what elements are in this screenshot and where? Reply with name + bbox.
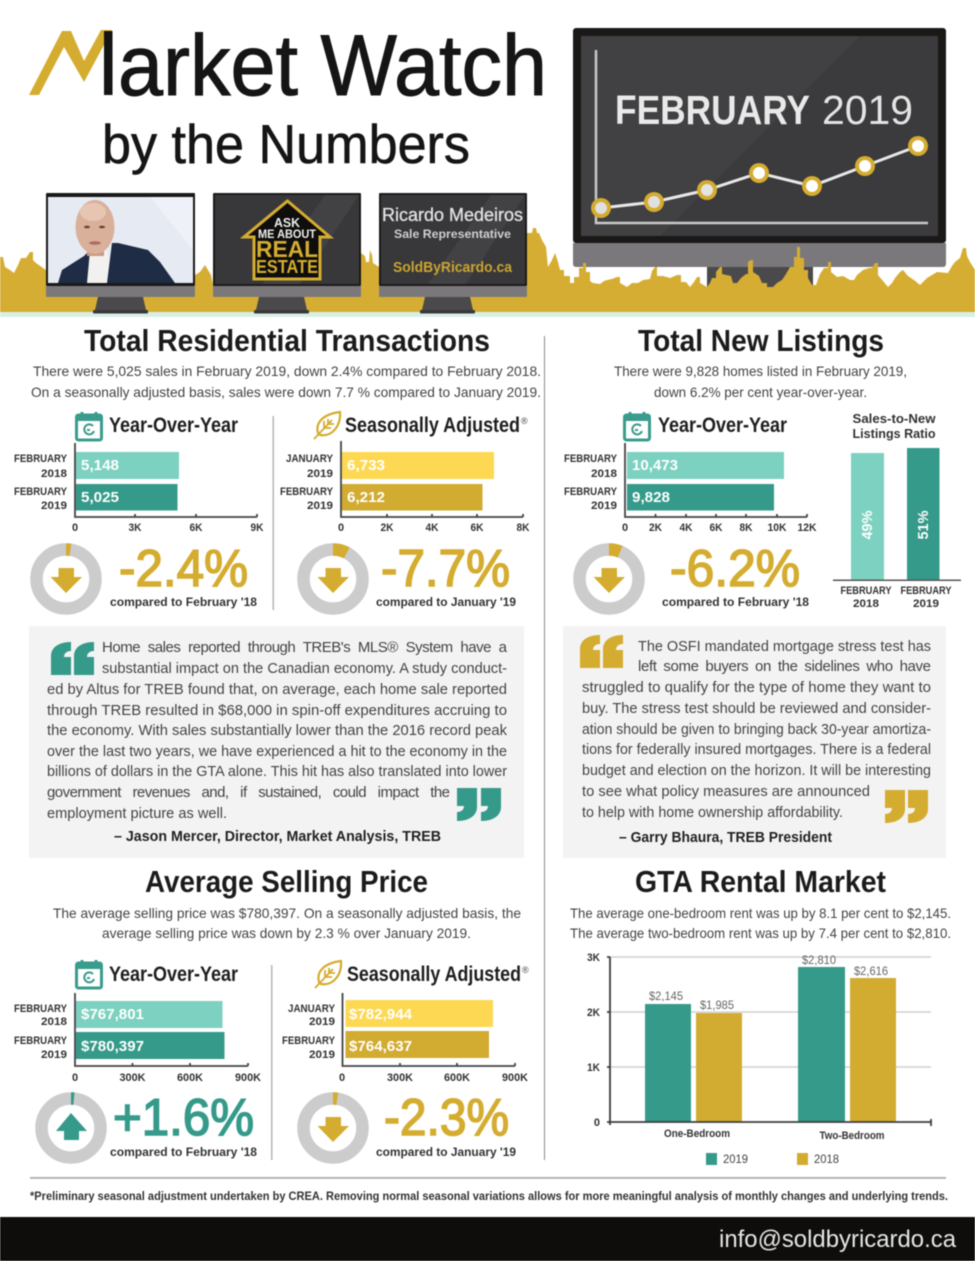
bar chart: sales-to-new listings ratio: FEBRUARY: [840, 585, 892, 597]
summary text: [570, 905, 951, 941]
summary text: [31, 363, 541, 400]
monitor: ask me about real estate logo: [213, 193, 361, 314]
quote text: tions for federally insured mortgages. There is a federal: [582, 741, 931, 758]
bar chart: rents by bedroom count: 0: [594, 1117, 600, 1129]
bar chart: price year over year: FEBRUARY: [14, 1003, 68, 1015]
seasonally adjusted heading: ®: [521, 416, 528, 426]
footnote: *Preliminary seasonal adjustment undertaken by CREA. Removing normal seasonal variations allows for more meaningful analysis of monthly changes and underlying trends.: [30, 1191, 948, 1203]
quote text: ation should be given to bringing back 30-year amortiza-: [582, 721, 931, 738]
bar chart: sales seasonally adjusted: 6,212: [347, 490, 385, 506]
monitor: agent name: Sale Representative: [394, 229, 511, 241]
comparison caption: compared to January '19: [376, 595, 516, 609]
bar chart: sales year over year: 6K: [190, 522, 203, 534]
donut: -6.2%: [580, 550, 638, 608]
summary text: [53, 905, 521, 941]
icon: calendar: [76, 960, 102, 988]
statistic: -6.2%: -6.2%: [670, 540, 800, 598]
donut: -2.3%: [304, 1098, 362, 1158]
icon: leaf: [315, 961, 341, 988]
bar chart: rents by bedroom count: 1K: [587, 1062, 600, 1074]
bar chart: rents by bedroom count: $2,810: [802, 953, 836, 967]
bar chart: price seasonally adjusted: 0: [339, 1072, 345, 1084]
quote text: government revenues and, if sustained, could impact the: [47, 784, 450, 801]
bar chart: price year over year: 2018: [41, 1016, 67, 1028]
section: total residential transactions: [14, 323, 541, 609]
bar chart: listings year over year: 10K: [768, 522, 787, 534]
quote text: [47, 639, 508, 822]
bar chart: sales seasonally adjusted: 6,733: [347, 458, 385, 474]
donut: -2.4%: [36, 550, 96, 608]
bar chart: price year over year: [14, 993, 261, 1084]
footer bar: info@soldbyricardo.ca: [719, 1226, 957, 1253]
year-over-year heading: Year-Over-Year: [109, 963, 238, 986]
quote text: to help with home ownership affordability.: [582, 804, 843, 821]
icon: opening quote mark: [51, 642, 94, 675]
bar chart: price year over year: 2019: [41, 1049, 67, 1061]
comparison caption: compared to February '18: [110, 595, 257, 609]
bar chart: listings year over year: 10,473: [632, 458, 678, 474]
quote text: ed by Altus for TREB found that, on average, each home sale reported: [47, 681, 507, 698]
bar chart: listings year over year: 8K: [740, 522, 753, 534]
large monitor: February 2019 line chart: [573, 28, 946, 287]
summary text: The average two-bedroom rent was up by 7.4 per cent to $2,810.: [570, 925, 951, 941]
quote text: Home sales reported through TREB's MLS® System have a: [102, 639, 508, 656]
bar chart: price year over year: $767,801: [81, 1007, 144, 1023]
monitor: ask me about real estate logo: REAL: [256, 236, 318, 262]
bar chart: listings year over year: FEBRUARY: [564, 486, 618, 498]
donut: -7.7%: [304, 550, 362, 608]
column dividers: [271, 336, 545, 1160]
bar chart: rents by bedroom count: $2,616: [854, 964, 888, 978]
attribution: – Jason Mercer, Director, Market Analysis, TREB: [114, 828, 441, 845]
legend: 2018: [814, 1152, 839, 1166]
bar chart: rents by bedroom count: $1,985: [700, 998, 734, 1012]
quote text: struggled to qualify for the type of home they want to: [582, 679, 931, 696]
seasonally adjusted heading: Seasonally Adjusted: [347, 963, 521, 986]
quote text: budget and election on the horizon. It will be interesting: [582, 762, 931, 779]
monitor: agent photo: [46, 193, 195, 314]
bar chart: listings year over year: 2018: [591, 468, 617, 480]
bar chart: price seasonally adjusted: 2019: [309, 1049, 335, 1061]
monitor: agent name: SoldByRicardo.ca: [393, 260, 513, 276]
monitor: agent name: [379, 193, 527, 314]
month and year: FEBRUARY: [615, 87, 810, 133]
bar chart: listings year over year: 9,828: [632, 490, 670, 506]
seasonally adjusted heading: Seasonally Adjusted: [345, 414, 520, 437]
bar chart: price seasonally adjusted: 900K: [502, 1072, 528, 1084]
year-over-year heading: Year-Over-Year: [109, 414, 238, 437]
summary text: The average one-bedroom rent was up by 8.1 per cent to $2,145.: [570, 905, 951, 921]
monitor: ask me about real estate logo: ASK: [274, 215, 301, 230]
section: average selling price: [14, 864, 529, 1159]
monitor: ask me about real estate logo: ME ABOUT: [258, 229, 316, 241]
bar chart: sales seasonally adjusted: FEBRUARY: [280, 486, 334, 498]
icon: leaf: [314, 412, 340, 439]
statistic: -2.3%: -2.3%: [384, 1089, 509, 1147]
icon: calendar: [624, 412, 650, 440]
month and year: 2019: [822, 87, 913, 133]
panel: Jason Mercer quote: [29, 626, 524, 858]
bar chart: sales seasonally adjusted: JANUARY: [286, 453, 334, 465]
summary text: There were 5,025 sales in February 2019, down 2.4% compared to February 2018.: [33, 363, 541, 379]
statistic: +1.6%: +1.6%: [113, 1089, 254, 1147]
comparison caption: compared to February '18: [662, 595, 809, 609]
comparison caption: compared to February '18: [110, 1145, 257, 1159]
trend line with markers: [591, 136, 928, 218]
quote text: The OSFI mandated mortgage stress test has: [638, 638, 931, 655]
bar chart: price year over year: $780,397: [81, 1039, 144, 1055]
summary text: [614, 363, 907, 400]
summary text: average selling price was down by 2.3 % over January 2019.: [102, 925, 471, 941]
bar chart: price year over year: 300K: [120, 1072, 146, 1084]
bar chart: price seasonally adjusted: [282, 993, 528, 1084]
seasonally adjusted heading: ®: [522, 965, 529, 975]
attribution: – Garry Bhaura, TREB President: [619, 829, 832, 846]
bar chart: sales-to-new listings ratio: 49%: [860, 510, 876, 540]
bar chart: rents by bedroom count: $2,145: [649, 989, 683, 1003]
bar chart: sales-to-new listings ratio: Listings Ratio: [852, 426, 936, 441]
bar chart: price seasonally adjusted: 600K: [444, 1072, 470, 1084]
bar chart: listings year over year: 6K: [710, 522, 723, 534]
quote text: substantial impact on the Canadian economy. A study conduct-: [102, 660, 507, 677]
quote text: employment picture as well.: [47, 805, 227, 822]
bar chart: sales year over year: 0: [72, 522, 78, 534]
bar chart: sales year over year: 5,148: [81, 458, 119, 474]
icon: calendar: [76, 412, 102, 440]
bar chart: sales seasonally adjusted: 4K: [426, 522, 439, 534]
bar chart: sales seasonally adjusted: 6K: [470, 522, 484, 534]
bar chart: sales seasonally adjusted: [280, 441, 530, 534]
bar chart: rents by bedroom count: 3K: [587, 952, 600, 964]
bar chart: sales seasonally adjusted: 0: [338, 522, 344, 534]
bar chart: rents by bedroom count: Two-Bedroom: [820, 1130, 885, 1142]
bar chart: listings year over year: FEBRUARY: [564, 453, 618, 465]
bar chart: rents by bedroom count: 2K: [587, 1007, 600, 1019]
bar chart: price seasonally adjusted: FEBRUARY: [282, 1035, 336, 1047]
legend: 2019: [723, 1152, 748, 1166]
legend: [706, 1152, 839, 1166]
bar chart: rents by bedroom count: [587, 952, 931, 1142]
monitor: agent name: Ricardo Medeiros: [382, 205, 523, 225]
bar chart: listings year over year: [564, 443, 817, 534]
bar chart: listings year over year: 12K: [798, 522, 817, 534]
bar chart: rents by bedroom count: One-Bedroom: [664, 1128, 730, 1140]
bar chart: price year over year: FEBRUARY: [14, 1035, 68, 1047]
summary text: The average selling price was $780,397. On a seasonally adjusted basis, the: [53, 905, 521, 921]
monitor: ask me about real estate logo: ESTATE: [256, 257, 318, 277]
bar chart: sales-to-new listings ratio: 51%: [916, 510, 932, 540]
summary text: On a seasonally adjusted basis, sales were down 7.7 % compared to January 2019.: [31, 384, 541, 400]
bar chart: sales year over year: 2018: [41, 468, 67, 480]
bar chart: sales year over year: FEBRUARY: [14, 486, 68, 498]
bar chart: sales year over year: 2019: [41, 500, 67, 512]
statistic: -7.7%: -7.7%: [381, 540, 510, 598]
quote text: through TREB resulted in $68,000 in spin-off expenditures accruing to: [47, 702, 507, 719]
section: GTA rental market: [570, 864, 951, 1166]
panel: Garry Bhaura quote: [563, 626, 946, 858]
bar chart: price seasonally adjusted: $782,944: [349, 1007, 412, 1023]
bar chart: sales year over year: 5,025: [81, 490, 119, 506]
icon: closing quote mark: [457, 788, 501, 821]
quote text: to see what policy measures are announced: [582, 783, 870, 800]
bar chart: price seasonally adjusted: $764,637: [349, 1039, 412, 1055]
bar chart: sales seasonally adjusted: 2019: [307, 500, 333, 512]
bar chart: sales-to-new listings ratio: FEBRUARY: [900, 585, 952, 597]
bar chart: sales seasonally adjusted: 2K: [380, 522, 394, 534]
bar chart: price seasonally adjusted: 300K: [387, 1072, 413, 1084]
bar chart: sales year over year: 3K: [128, 522, 142, 534]
icon: closing quote mark: [885, 790, 928, 823]
section: total new listings: [564, 323, 961, 610]
bar chart: sales year over year: 9K: [250, 522, 264, 534]
bar chart: listings year over year: 0: [622, 522, 628, 534]
title: Market Watch: arket Watch: [118, 18, 547, 114]
bar chart: price year over year: 900K: [235, 1072, 261, 1084]
quote text: the economy. With sales substantially lower than the 2016 record peak: [47, 722, 507, 739]
footer bar: [0, 1217, 975, 1261]
bar chart: sales-to-new listings ratio: 2018: [853, 598, 879, 610]
chart axes: [596, 50, 928, 223]
heading: Total New Listings: [638, 323, 884, 358]
bar chart: sales year over year: [14, 443, 264, 534]
quote text: over the last two years, we have experienced a hit to the economy in the: [47, 743, 507, 760]
quote text: left some buyers on the sidelines who have: [638, 658, 931, 675]
bar chart: sales seasonally adjusted: 8K: [516, 522, 530, 534]
mint strip: [0, 312, 975, 317]
bar chart: sales-to-new listings ratio: 2019: [913, 598, 939, 610]
bar chart: sales-to-new listings ratio: [833, 411, 961, 610]
bar chart: sales seasonally adjusted: 2019: [307, 468, 333, 480]
bar chart: listings year over year: 2K: [649, 522, 662, 534]
quote text: buy. The stress test should be reviewed and consider-: [582, 700, 931, 717]
bar chart: price year over year: 600K: [177, 1072, 203, 1084]
quote text: [582, 638, 931, 821]
bar chart: price seasonally adjusted: JANUARY: [288, 1003, 336, 1015]
year-over-year heading: Year-Over-Year: [658, 414, 787, 437]
bar chart: sales year over year: FEBRUARY: [14, 453, 68, 465]
comparison caption: compared to January '19: [376, 1145, 516, 1159]
summary text: There were 9,828 homes listed in February 2019,: [614, 363, 907, 379]
quote text: billions of dollars in the GTA alone. This hit has also translated into lower: [47, 763, 507, 780]
skyline band: [0, 228, 975, 312]
bar chart: price year over year: 0: [72, 1072, 78, 1084]
statistic: -2.4%: -2.4%: [119, 540, 248, 598]
summary text: down 6.2% per cent year-over-year.: [654, 384, 867, 400]
icon: opening quote mark: [580, 635, 623, 668]
donut: +1.6%: [42, 1098, 100, 1158]
subtitle: by the Numbers: by the Numbers: [102, 113, 470, 175]
heading: GTA Rental Market: [635, 864, 886, 899]
bar chart: price seasonally adjusted: 2019: [309, 1016, 335, 1028]
bar chart: sales-to-new listings ratio: Sales-to-New: [852, 411, 936, 426]
bar chart: listings year over year: 4K: [680, 522, 693, 534]
bar chart: listings year over year: 2019: [591, 500, 617, 512]
heading: Average Selling Price: [145, 864, 428, 899]
heading: Total Residential Transactions: [84, 323, 490, 358]
